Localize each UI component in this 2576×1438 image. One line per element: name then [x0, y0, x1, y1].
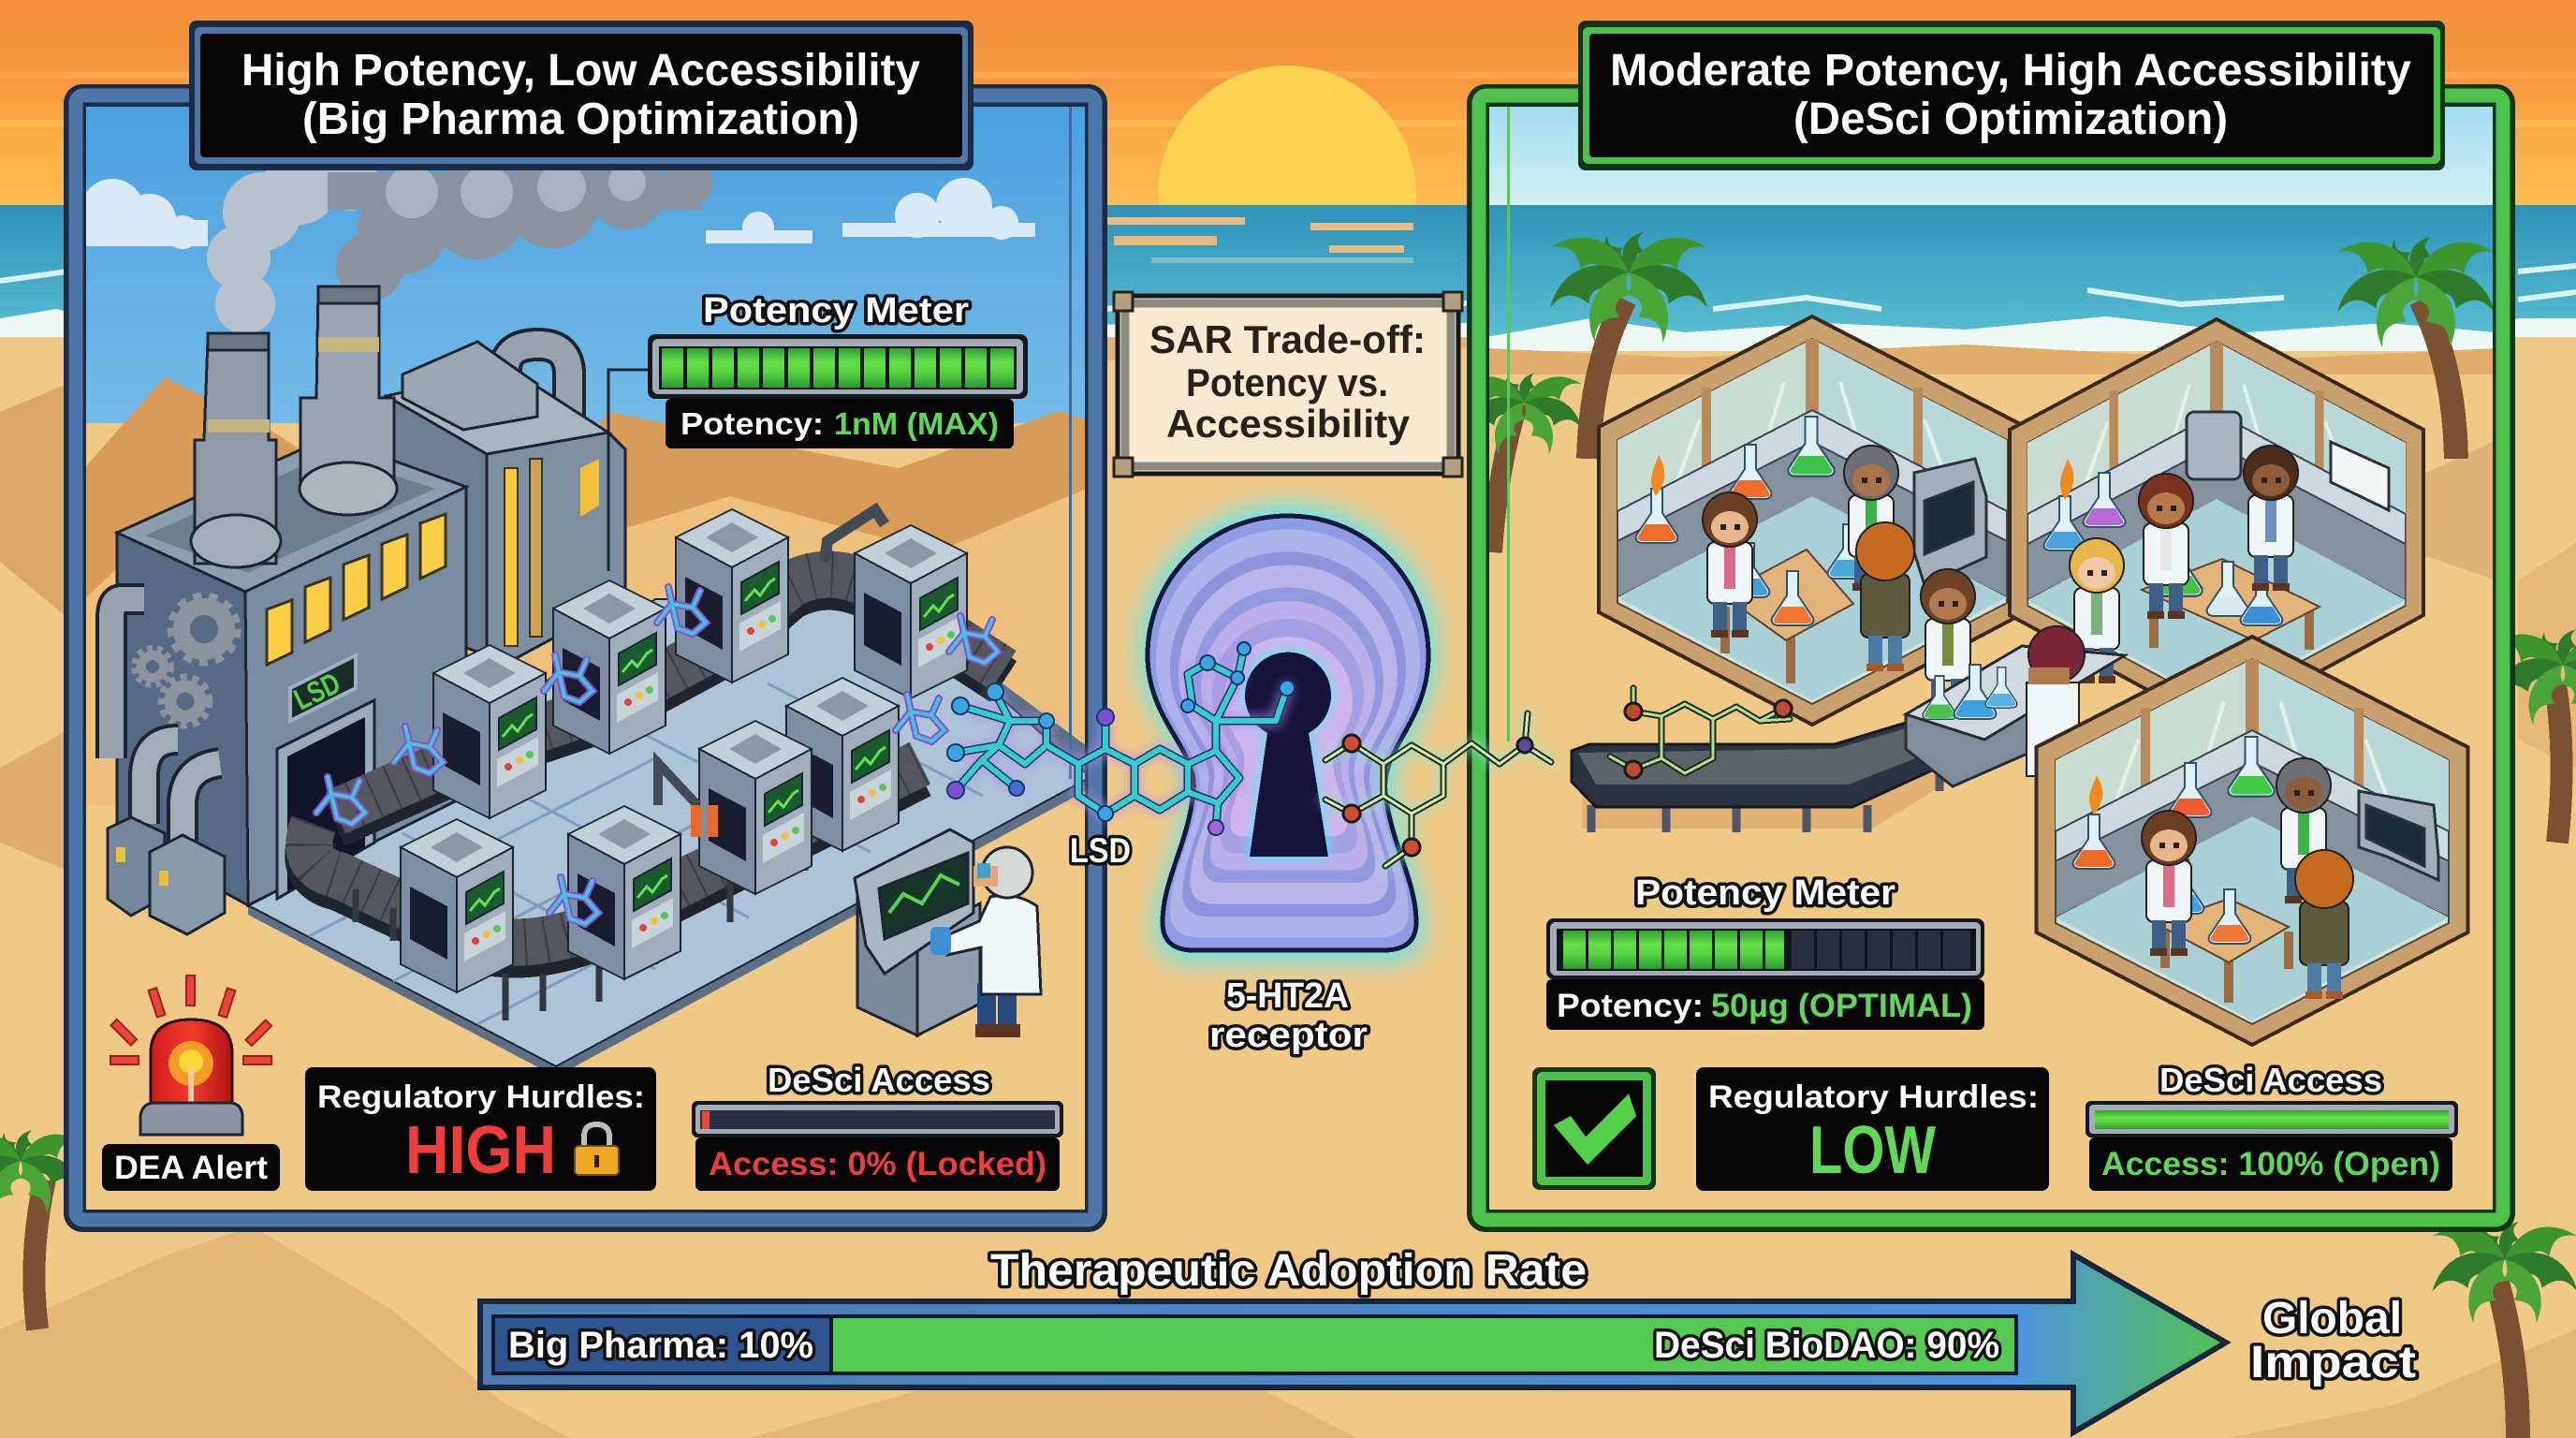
palm tree: outer right bottom — [2423, 1217, 2576, 1438]
factory floor — [248, 599, 1090, 1077]
label: DEA Alert: DEA Alert — [114, 1150, 268, 1186]
palm tree left — [1541, 227, 1717, 459]
room 1 table — [1720, 550, 1853, 683]
potency meter: Big Pharma — [608, 291, 1028, 571]
panel scene: sky, sea, sand — [1489, 107, 2493, 579]
room 2 table — [2142, 559, 2320, 674]
receptor glow — [1140, 505, 1436, 961]
factory door — [277, 700, 374, 899]
molecule: mescaline-like ligand — [1325, 713, 1551, 866]
icon: DEA alert beacon — [110, 976, 271, 1135]
palm tree right — [2328, 232, 2504, 459]
background: sunset sky — [0, 0, 2576, 205]
lab room 2 — [2010, 319, 2423, 727]
label: DeSci Access — [768, 1061, 990, 1099]
regulatory hurdles: high: HIGH — [405, 1113, 556, 1188]
vertical accent line — [1069, 105, 1072, 779]
DeSci share: DeSci BioDAO: 90% — [1654, 1325, 1999, 1366]
conveyor belts — [309, 575, 1003, 1020]
room 3 monitor — [2359, 791, 2438, 880]
green vertical accent line — [1507, 105, 1510, 741]
panel frame — [75, 95, 1096, 1221]
access bar — [2086, 1101, 2458, 1137]
second tower with arched pipe — [387, 342, 625, 674]
meter label: Potency Meter — [1635, 873, 1895, 913]
room 1 flame — [1651, 455, 1664, 496]
icon: green check box — [1532, 1067, 1656, 1190]
arrow shape — [480, 1255, 2226, 1432]
main factory building — [117, 437, 466, 905]
readout — [1546, 979, 1984, 1030]
control console — [855, 829, 980, 1035]
room 1 monitor — [1914, 459, 1986, 585]
molecule on right conveyor — [1610, 688, 1792, 778]
receptor rings — [1148, 516, 1428, 950]
readout: 1nM (MAX) — [834, 406, 999, 441]
readout — [666, 399, 1014, 448]
molecule glow — [956, 649, 1287, 828]
sun — [1158, 66, 1416, 205]
readout: Access: 100% (Open) — [2101, 1146, 2440, 1182]
keyhole slot — [1243, 649, 1333, 858]
background: sand and dunes — [0, 337, 2576, 1438]
readout: Access: 0% (Locked) — [709, 1146, 1046, 1182]
door opening — [287, 717, 365, 891]
room 2 flasks — [2044, 473, 2282, 625]
workbench flasks — [1923, 665, 2017, 719]
title: Big Pharma — [189, 21, 973, 170]
card: SAR trade-off: SAR Trade-off: — [1149, 317, 1426, 361]
label: LSD: LSD — [1070, 831, 1131, 870]
molecule bonds — [956, 649, 1287, 828]
label: DEA Alert — [102, 1144, 280, 1191]
readout — [695, 1137, 1060, 1191]
scientist at console — [930, 847, 1041, 1037]
molecule atoms — [947, 642, 1295, 835]
DeSci share — [831, 1316, 2016, 1373]
title: DeSci: Moderate Potency, High Accessibility — [1610, 46, 2411, 95]
belt on right panel — [1572, 723, 1956, 832]
label: 5-HT2A receptor — [1209, 976, 1368, 1055]
smoke plumes — [207, 150, 712, 334]
ligand atoms — [1343, 735, 1532, 856]
center workbench — [1906, 646, 2125, 786]
LSD sign: LSD — [288, 666, 345, 716]
palm tree small — [1489, 373, 1581, 552]
windows — [267, 514, 446, 665]
DeSci access: open — [2086, 1061, 2458, 1191]
readout — [2089, 1137, 2452, 1191]
icon: padlock — [575, 1124, 619, 1175]
burner flame — [2089, 775, 2102, 814]
label: 5-HT2A receptor: 5-HT2A — [1226, 976, 1349, 1016]
label: Global Impact: Global — [2262, 1294, 2402, 1343]
gears — [134, 596, 237, 726]
room 2 people — [2070, 446, 2298, 683]
room 2 tank and chart — [2187, 412, 2389, 510]
center scientists — [2027, 626, 2085, 776]
label: Global Impact — [2250, 1294, 2416, 1387]
label: 5-HT2A receptor: receptor — [1209, 1016, 1368, 1055]
regulatory hurdles: high: Regulatory Hurdles: — [317, 1079, 645, 1115]
access bar — [692, 1101, 1063, 1137]
room 3 people — [2142, 758, 2353, 999]
title: DeSci: (DeSci Optimization) — [1793, 95, 2228, 144]
meter label: Potency Meter — [703, 291, 969, 330]
readout: Potency: — [1557, 988, 1704, 1024]
lab room 1 — [1599, 316, 2026, 725]
DeSci access: locked — [692, 1061, 1063, 1191]
palm tree: outer left — [0, 1126, 88, 1329]
room 3 flasks — [2073, 737, 2275, 944]
panel: Big Pharma factory — [75, 95, 1096, 1221]
smokestack right — [300, 286, 397, 515]
robot arms — [658, 510, 885, 837]
card: SAR trade-off — [1114, 292, 1462, 477]
ligand glow — [1325, 713, 1551, 866]
room 1 flasks — [1636, 417, 1869, 625]
regulatory hurdles: low: Regulatory Hurdles: — [1708, 1079, 2039, 1115]
panel scene: sky, clouds, dunes and sand — [86, 107, 1085, 805]
big pharma share: Big Pharma: 10% — [508, 1325, 813, 1366]
readout: Potency: — [681, 406, 824, 441]
title: Big Pharma: (Big Pharma Optimization) — [302, 95, 859, 144]
lab room 3 — [2037, 637, 2467, 1045]
machines on the conveyor line — [401, 509, 967, 992]
regulatory hurdles: low: LOW — [1809, 1113, 1936, 1188]
label: Global Impact: Impact — [2250, 1338, 2416, 1387]
title: DeSci — [1578, 21, 2445, 170]
card: SAR trade-off: Accessibility — [1166, 402, 1411, 446]
regulatory hurdles: high — [305, 1067, 656, 1191]
room 2 flame — [2060, 459, 2073, 500]
receptor keyhole — [1140, 505, 1436, 961]
adoption rate arrow — [480, 1255, 2226, 1432]
panel frame — [1478, 95, 2504, 1221]
big pharma share — [493, 1316, 831, 1373]
ligand bonds — [1325, 713, 1551, 866]
connector — [608, 370, 648, 571]
meter bar — [648, 334, 1028, 399]
meter bar — [1546, 918, 1984, 979]
room 3 table — [2157, 899, 2293, 1003]
heading: Therapeutic Adoption Rate: Therapeutic Adoption Rate — [990, 1246, 1587, 1296]
molecule: LSD — [947, 642, 1295, 835]
readout: 50µg (OPTIMAL) — [1711, 988, 1972, 1024]
background: ocean — [0, 205, 2576, 348]
card: SAR trade-off: Potency vs. — [1186, 360, 1388, 404]
pipes and utility boxes — [108, 599, 225, 934]
regulatory hurdles: low — [1696, 1067, 2049, 1191]
title: Big Pharma: High Potency, Low Accessibility — [242, 46, 920, 95]
label: DeSci Access — [2159, 1061, 2382, 1099]
small molecules on belts — [316, 587, 998, 924]
palm tree: outer right middle — [2486, 625, 2576, 843]
panel: DeSci labs — [1458, 95, 2504, 1221]
smokestack left — [191, 333, 281, 567]
room 1 people — [1703, 446, 1975, 714]
potency meter: DeSci — [1546, 873, 1984, 1030]
